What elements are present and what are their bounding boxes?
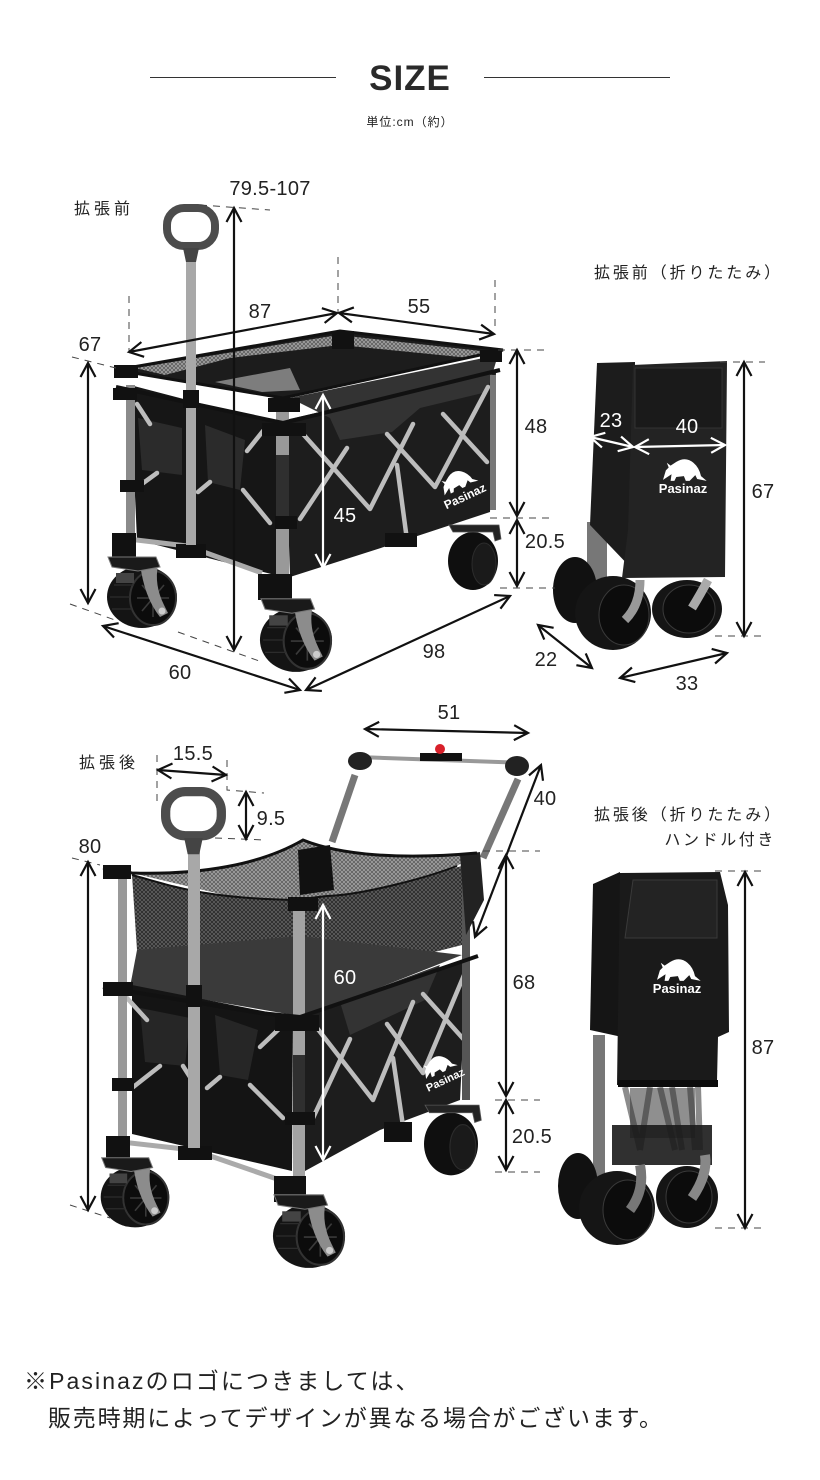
arrow: folded 33: [620, 653, 727, 678]
dimension numbers: 20.5: [525, 531, 565, 553]
wagon interior and mesh: [116, 331, 503, 398]
panel label: after expansion folded: ハンドル付き: [664, 831, 776, 849]
arrow: width 87: [129, 313, 337, 352]
dimension numbers: 68: [513, 972, 535, 994]
left fabric panel: [132, 985, 293, 1171]
title: SIZE: [369, 59, 451, 98]
logo: Pasinaz: [424, 1066, 467, 1095]
upper mesh band: [290, 355, 498, 440]
panel label: after expansion folded: [594, 806, 783, 849]
panel label: before expansion folded: 拡張前（折りたたみ）: [594, 264, 783, 282]
arrow: height 80: [87, 862, 89, 1210]
dimension numbers: 51: [438, 702, 460, 724]
wheels: [101, 1105, 481, 1268]
panel label: before expansion: 拡張前: [74, 200, 134, 218]
dimension numbers: 15.5: [173, 743, 213, 765]
dimension numbers: 60: [169, 662, 191, 684]
dimension numbers: 67: [752, 481, 774, 503]
dimension numbers: 23: [600, 410, 622, 432]
right fabric panel: [285, 372, 496, 577]
panel label: after expansion folded: 拡張後（折りたたみ）: [594, 806, 783, 824]
inner fabric: [130, 936, 462, 1017]
folding struts: [135, 387, 488, 540]
storage bag front: [622, 361, 727, 578]
arrow: folded depth 23: [590, 437, 633, 447]
dimension guides: [70, 205, 765, 1228]
arrow: height 48: [516, 350, 518, 516]
storage bag side: [590, 362, 635, 570]
arrow: depth 55: [339, 313, 494, 334]
dimension numbers: 79.5-107: [229, 178, 311, 200]
panel: wagon before expansion: [107, 208, 503, 672]
dimension numbers: 48: [525, 416, 547, 438]
folded struts and frame: [593, 1035, 712, 1185]
logo: [653, 959, 702, 996]
dimension numbers: 45: [334, 505, 356, 527]
arrow: folded height 67: [743, 362, 745, 636]
logo: [416, 1048, 467, 1095]
side pockets: [138, 418, 245, 490]
back mesh: [132, 840, 477, 900]
dimension numbers: 40: [534, 788, 556, 810]
bag pocket: [635, 368, 722, 428]
arrow: handle width 51: [365, 729, 528, 733]
dimension numbers: 87: [249, 301, 271, 323]
side mesh: [132, 866, 462, 985]
dimension numbers: 9.5: [257, 808, 285, 830]
logo: [433, 463, 488, 512]
bottom plate: [618, 1080, 718, 1087]
dimension numbers: 80: [79, 836, 101, 858]
pockets: [140, 965, 440, 1080]
arrow: folded 22: [538, 625, 592, 668]
storage bag front: [617, 872, 729, 1085]
rear frame: [587, 522, 607, 582]
folded wheels: [553, 557, 722, 650]
dimension numbers: 55: [408, 296, 430, 318]
dimension numbers: 22: [535, 649, 557, 671]
dimension numbers: 67: [79, 334, 101, 356]
frame posts: [118, 852, 484, 1179]
arrow: width 60: [103, 626, 300, 690]
panel label: after expansion: 拡張後: [79, 754, 139, 772]
arrow: length 98: [306, 596, 510, 690]
footnote: ※Pasinazのロゴにつきましては、: [24, 1368, 421, 1394]
arrow: height 68: [505, 855, 507, 1096]
panel: folded before expansion: [553, 361, 727, 650]
dimension numbers: 87: [752, 1037, 774, 1059]
arrow: folded width 40: [635, 445, 725, 447]
arrow: handle height: [233, 208, 235, 650]
dimension numbers: 98: [423, 641, 445, 663]
dimension numbers: 20.5: [512, 1126, 552, 1148]
folding struts: [127, 968, 467, 1126]
arrow: height 67: [87, 363, 89, 603]
bag pocket: [625, 880, 717, 938]
telescopic handle: [332, 744, 529, 858]
arrow: grip height 9.5: [245, 792, 247, 839]
logo: Pasinaz: [659, 481, 708, 496]
arrow: clearance 20.5: [516, 520, 518, 586]
footnote: [24, 1368, 664, 1431]
pull handle: [167, 208, 215, 545]
top rim: [113, 331, 503, 547]
dimension numbers: 60: [334, 967, 356, 989]
wheels: [107, 525, 501, 672]
logo: [659, 459, 708, 496]
storage bag side: [590, 872, 622, 1037]
base rail: [106, 1136, 306, 1202]
arrow: grip width 15.5: [158, 770, 226, 775]
panel: folded after expansion: [558, 872, 729, 1245]
arrow: inner height 45: [322, 395, 324, 568]
logo: Pasinaz: [442, 481, 488, 512]
arrow: handle length 40: [475, 765, 541, 937]
panel: wagon after expansion: [101, 744, 529, 1268]
base rail: [112, 533, 292, 600]
pull handle: [166, 792, 221, 1148]
unit note: 単位:cm（約）: [366, 114, 454, 129]
arrow: clearance 20.5 expanded: [505, 1100, 507, 1170]
folded wheels: [558, 1153, 718, 1245]
rims and brackets: [103, 840, 478, 1142]
arrow: inner height 60: [322, 905, 324, 1160]
right fabric panel: [305, 958, 467, 1171]
logo: Pasinaz: [653, 981, 702, 996]
frame posts: [126, 375, 496, 605]
left fabric panel: [130, 385, 283, 577]
footnote: 販売時期によってデザインが異なる場合がございます。: [48, 1405, 664, 1431]
arrow: folded height 87: [744, 872, 746, 1228]
dimension numbers: [79, 178, 774, 1148]
dimension numbers: 40: [676, 416, 698, 438]
dimension numbers: 33: [676, 673, 698, 695]
